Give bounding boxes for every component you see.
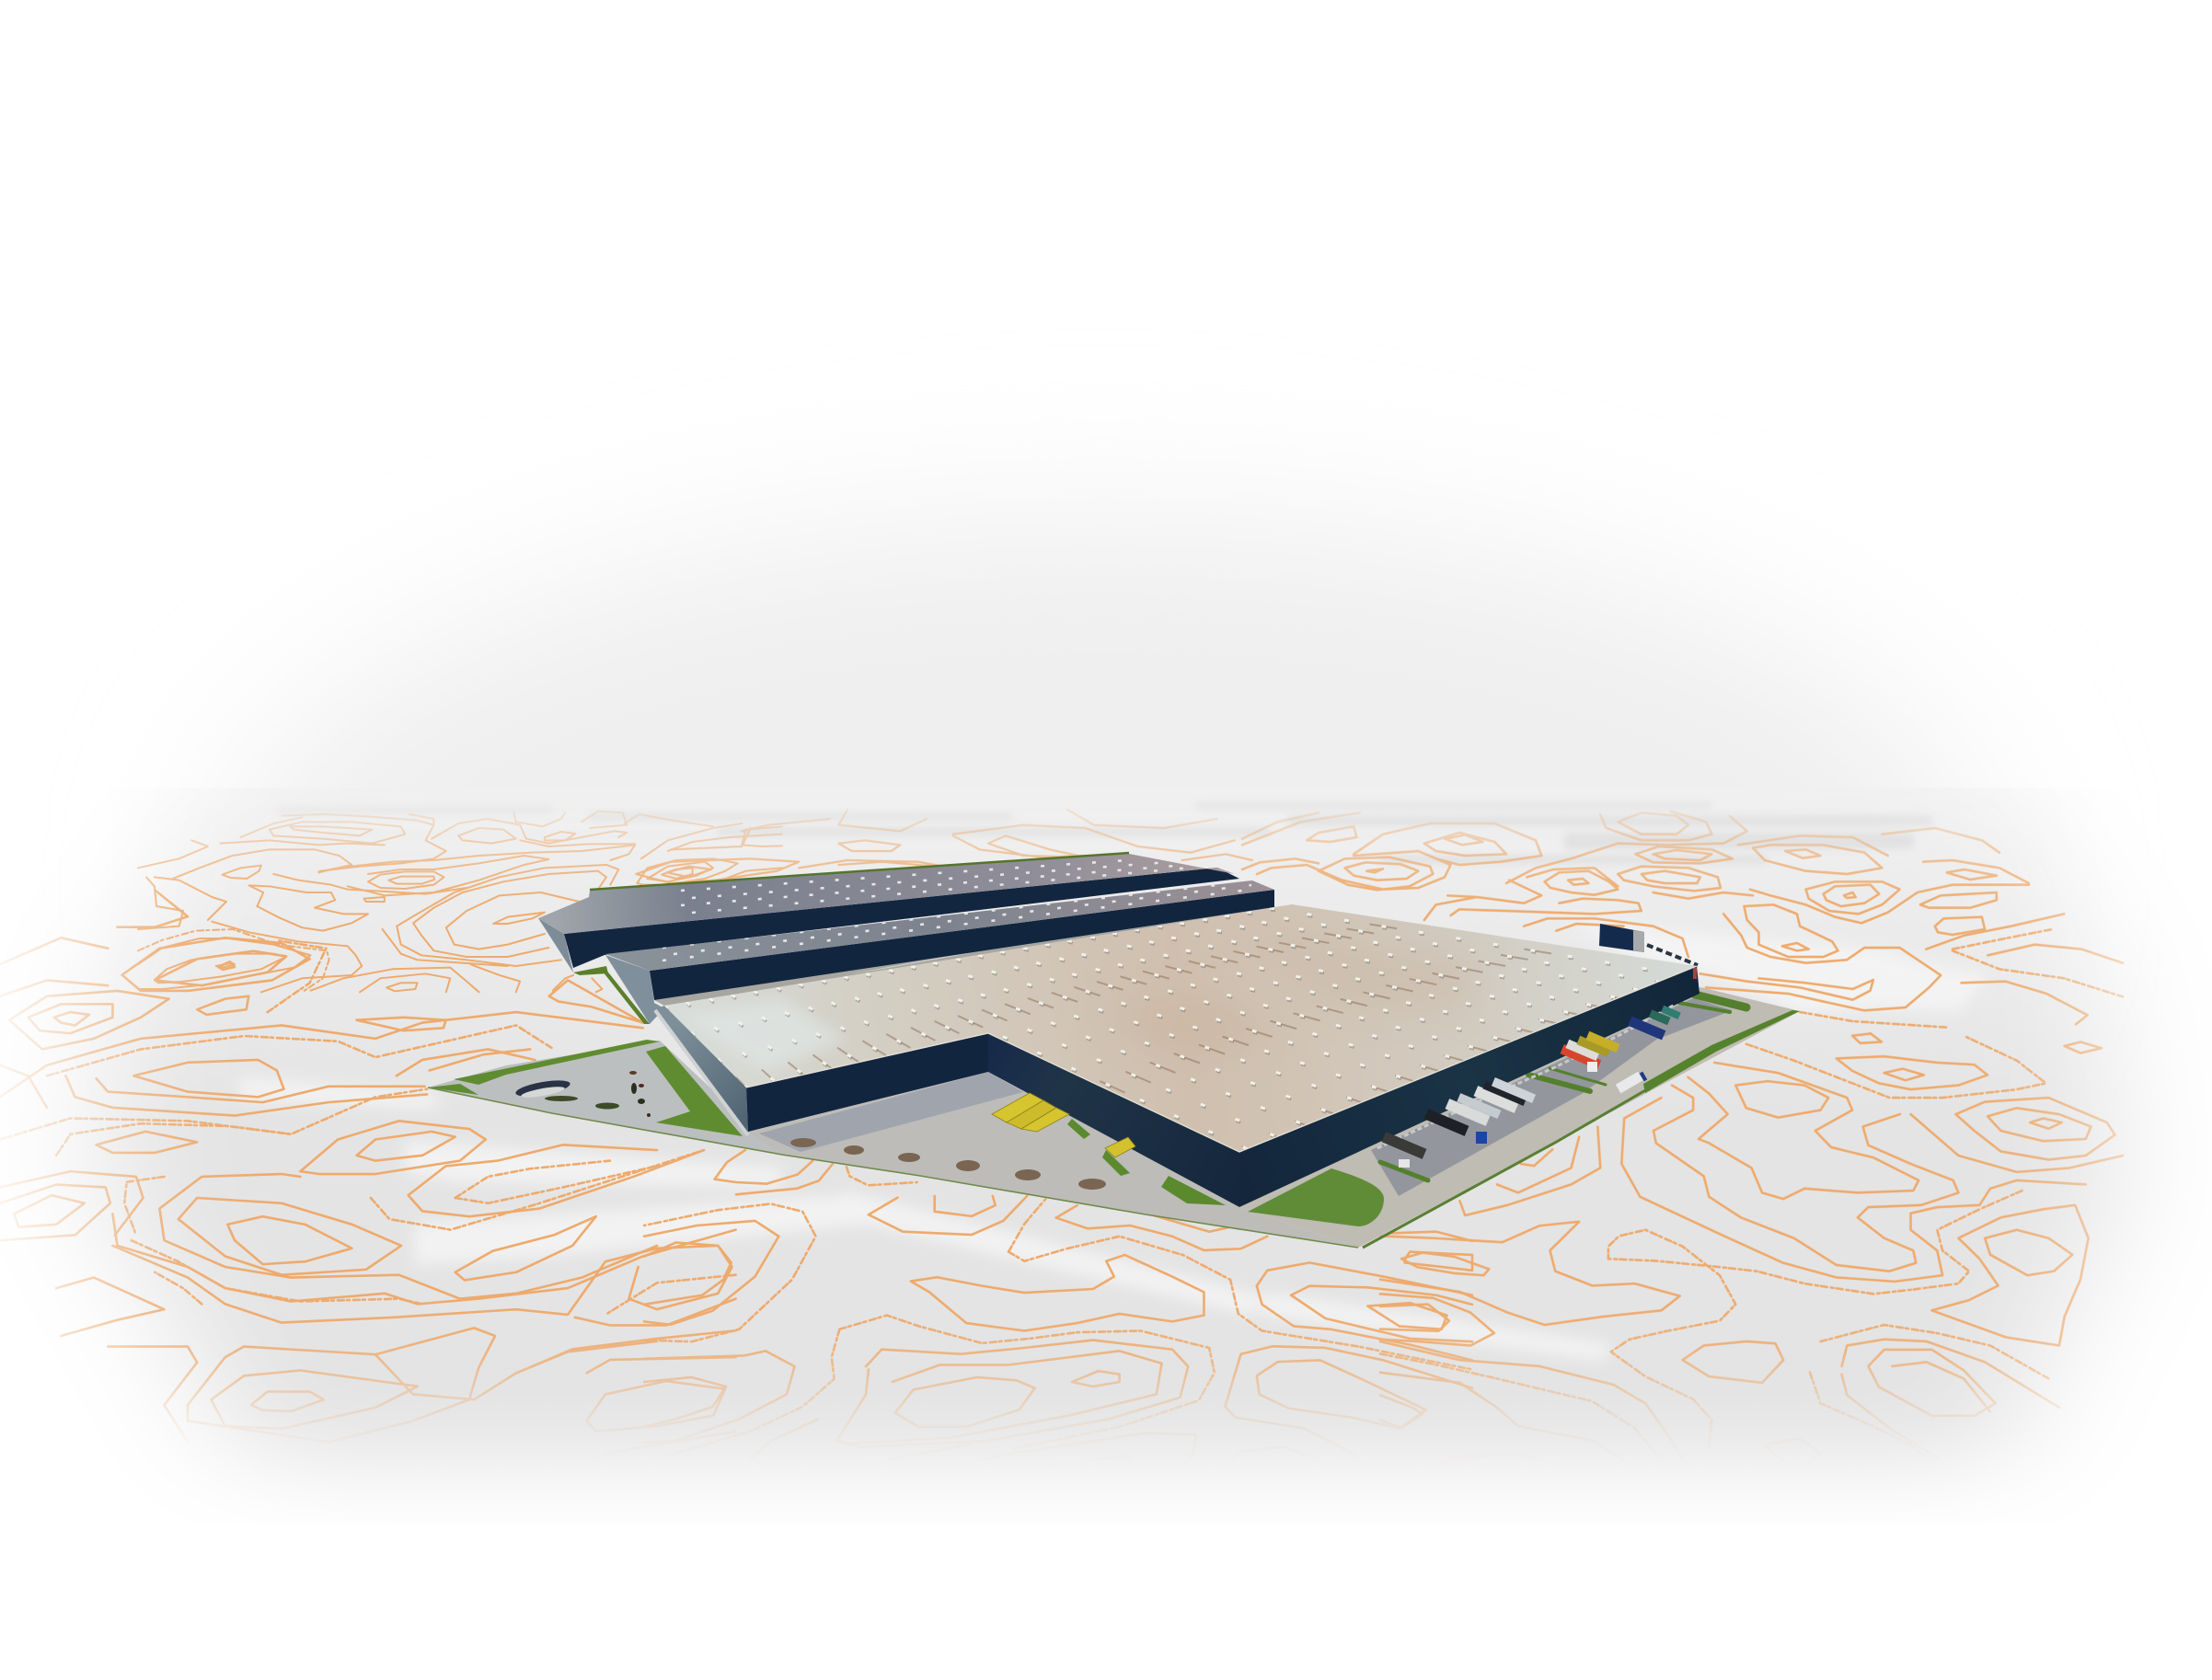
concrete strip between rear hall and main hall <box>654 904 1292 1006</box>
rear hall one: left end wall <box>538 918 573 972</box>
green verge along the right edge <box>1643 1010 1800 1093</box>
equipment on the concrete strip <box>947 937 1005 950</box>
rear hall two: dark wall <box>650 890 1274 1000</box>
main hall: pale walkway along left wall <box>655 1010 748 1135</box>
rear hall two: green bank <box>603 969 650 1024</box>
corner lawn by the front yard <box>1161 1176 1226 1205</box>
rear hall two: left end wall <box>605 955 664 1024</box>
main hall: long loading wall <box>1239 966 1699 1207</box>
loading road along the right side <box>1239 987 1800 1248</box>
plaza lawns <box>428 1040 743 1136</box>
dark loading yard <box>1371 998 1733 1196</box>
main hall: left wall <box>655 1006 748 1133</box>
sculpture and planters on the plaza <box>514 1071 651 1117</box>
pale fields and roads in the photo <box>239 920 1987 1362</box>
contours: upper right <box>1242 811 2123 1028</box>
faded sky dome <box>221 515 1987 1251</box>
main hall: inner notch wall, right <box>988 1033 1239 1207</box>
contours: just below the site edge <box>715 1150 917 1194</box>
plaza at the left tip of the site <box>428 1041 782 1155</box>
yellow containers in the front yard <box>992 1093 1135 1157</box>
front yard paving <box>748 1072 1358 1248</box>
dock doors along loading wall <box>1377 1005 1675 1148</box>
parked trailers and trucks <box>1382 1006 1681 1168</box>
main hall: red logo on the corner <box>1693 968 1697 979</box>
contours: far left and lower left <box>0 890 736 1474</box>
rear hall one <box>538 853 1239 975</box>
rear hall two: roof vents <box>662 883 1265 961</box>
orange topographic contour lines <box>0 810 2123 1488</box>
front yard building shadow <box>759 1072 1023 1152</box>
contours: lower right <box>1380 1033 2123 1488</box>
contours: lower centre <box>644 1196 1472 1487</box>
rear hall one: roof vents <box>681 859 1201 913</box>
entry lawn <box>1248 1168 1384 1226</box>
rear hall one: green edge <box>573 966 608 975</box>
mulch planting beds <box>790 1138 1106 1190</box>
contours: above warehouse <box>636 810 1252 883</box>
main hall: roof edge highlight <box>746 966 1697 1152</box>
contours: upper left <box>138 811 782 992</box>
main hall: roof <box>664 904 1697 1152</box>
grass islands in the yards <box>1380 995 1746 1180</box>
rear tower unit <box>1599 924 1698 965</box>
rear hall two: roof <box>605 880 1274 971</box>
main hall: inner notch wall, left <box>746 1033 988 1132</box>
main hall: roof patches, streaks and vents <box>664 908 2212 1380</box>
rear hall two <box>603 880 1274 1024</box>
rear hall one: roof <box>538 854 1235 934</box>
scene: warehouse on faded aerial terrain <box>0 519 2144 1485</box>
aerial ground photo, faded at edges <box>72 808 2144 1485</box>
fence line along the site edge <box>428 1087 1358 1248</box>
main hall <box>655 904 2212 1380</box>
warehouse site <box>428 853 2212 1380</box>
distant tree lines on the horizon <box>722 816 1929 861</box>
rear hall one: dark wall <box>564 868 1239 968</box>
